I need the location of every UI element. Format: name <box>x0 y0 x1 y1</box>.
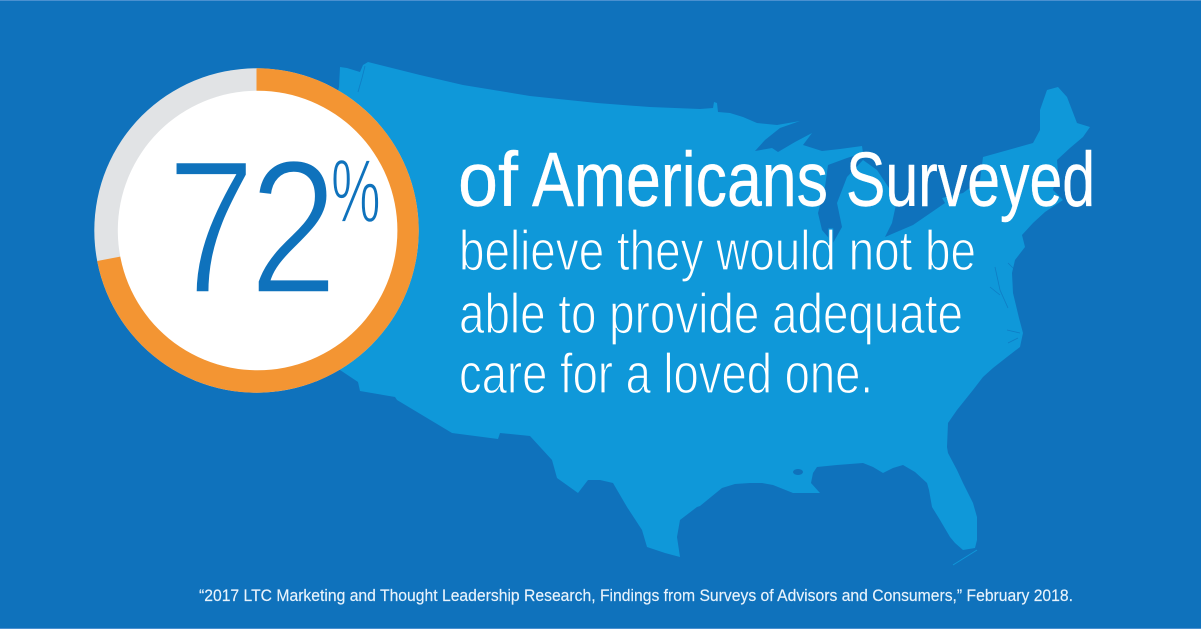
line 3: care for a loved one. <box>459 342 873 406</box>
percent sign: % <box>331 140 381 241</box>
line 2: able to provide adequate <box>459 282 963 346</box>
chart inner disc <box>118 91 397 370</box>
map: United States silhouette <box>330 62 1090 565</box>
chart value arc <box>97 68 419 393</box>
word: Surveyed: Surveyed <box>846 137 1095 223</box>
big number 72: 72 <box>167 121 332 334</box>
headline <box>458 137 1095 223</box>
chart track <box>94 68 419 393</box>
source citation: “2017 LTC Marketing and Thought Leadership Research, Findings from Surveys of Advisors and Consumers,” February 2018. <box>199 586 1073 605</box>
line 1: believe they would not be <box>459 219 976 283</box>
body text <box>459 219 976 406</box>
donut chart: 72 percent <box>94 68 419 393</box>
word: Americans: Americans <box>532 137 828 223</box>
word: of: of <box>458 137 519 223</box>
